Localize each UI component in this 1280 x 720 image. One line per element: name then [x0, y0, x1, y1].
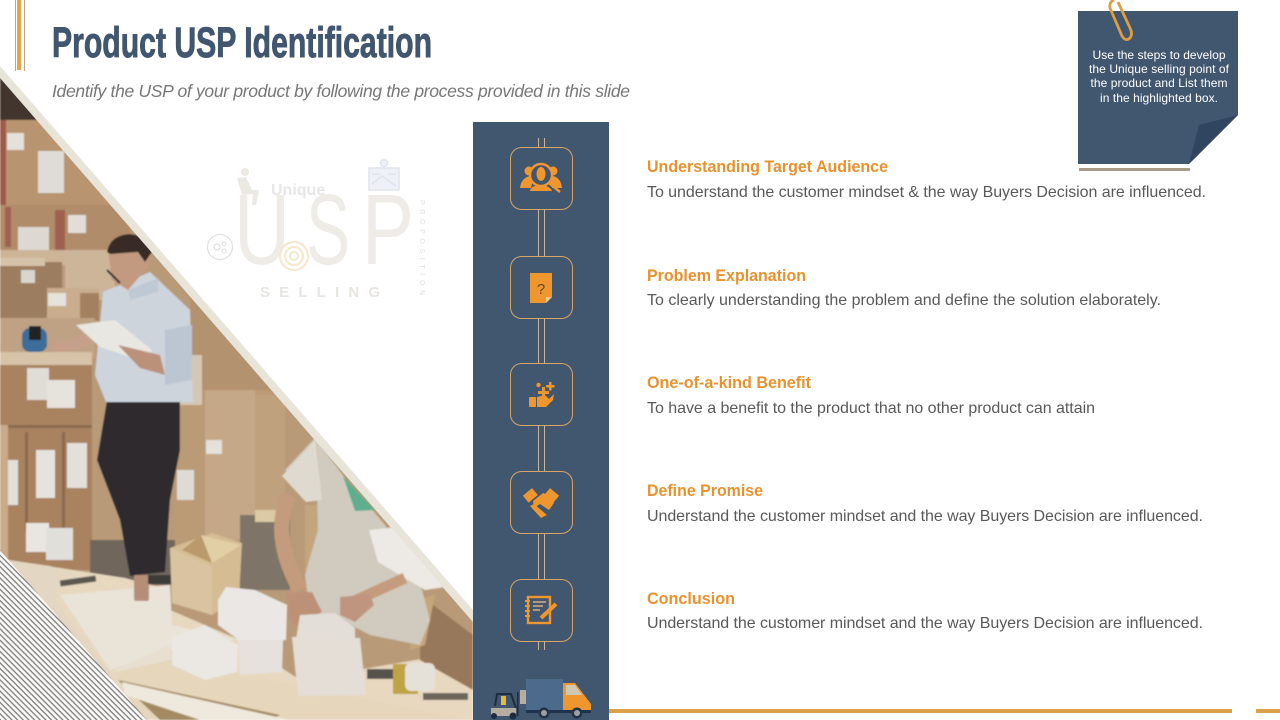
- note text: the Unique selling point of: [1089, 62, 1230, 76]
- icon: dashboard: [369, 160, 399, 190]
- step 5 text: [647, 590, 1203, 632]
- background boxes right: [191, 301, 260, 389]
- word: selling: SELLING: [260, 284, 380, 301]
- callout: sticky note: [1078, 0, 1238, 171]
- icon: target: [280, 242, 308, 270]
- panel: steps sidebar: [473, 122, 609, 720]
- step 1 text: To understand the customer mindset & the way Buyers Decision are influenced.: [647, 184, 1206, 201]
- watermark: USP logo: [208, 160, 425, 301]
- step 2 icon box: question document: [510, 256, 572, 318]
- woman: [420, 595, 473, 690]
- icon: gears: [208, 234, 232, 260]
- title: Product USP Identification: [52, 19, 432, 67]
- step 1 text: Understanding Target Audience: [647, 158, 888, 176]
- step 5 text: Understand the customer mindset and the way Buyers Decision are influenced.: [647, 615, 1203, 632]
- step 3 icon box: hand with sparkles: [510, 364, 572, 426]
- icon: forklift and delivery truck: [491, 679, 591, 720]
- word: proposition: PROPOSITION: [418, 200, 425, 295]
- bottom rule: [609, 709, 1280, 713]
- step 4 icon box: handshake: [510, 472, 572, 534]
- man: [97, 400, 180, 576]
- letter: S: S: [306, 174, 350, 286]
- table and sheets: [52, 566, 473, 720]
- step 2 text: [647, 267, 1161, 309]
- icon: reading person: [237, 168, 259, 205]
- step 4 text: Understand the customer mindset and the way Buyers Decision are influenced.: [647, 508, 1203, 525]
- step 5 text: Conclusion: [647, 590, 735, 608]
- note text: the product and List them: [1090, 76, 1228, 90]
- white boxes: [218, 587, 287, 641]
- step 3 text: To have a benefit to the product that no other product can attain: [647, 400, 1095, 417]
- word: Unique: Unique: [271, 182, 325, 199]
- step 2 text: To clearly understanding the problem and define the solution elaborately.: [647, 292, 1161, 309]
- background boxes left: [0, 78, 37, 121]
- step 1 icon box: audience search: [510, 148, 572, 210]
- note text: in the highlighted box.: [1100, 91, 1218, 105]
- subtitle: Identify the USP of your product by following the process provided in this slide: [52, 81, 630, 101]
- note text: Use the steps to develop: [1092, 48, 1226, 62]
- step 5 icon box: notepad and pen: [510, 580, 572, 642]
- step 3 text: [647, 374, 1095, 417]
- accent bars: [15, 0, 25, 71]
- letter: U: U: [234, 174, 290, 286]
- step 1 text: [647, 158, 1206, 201]
- tape gun: [367, 669, 397, 679]
- cardboard box: [170, 533, 242, 615]
- connector lines: [538, 138, 544, 650]
- hatched corner triangle: [0, 550, 147, 720]
- note text: [1089, 48, 1230, 105]
- photo: warehouse workers packing boxes: [0, 70, 473, 720]
- diagonal band: [0, 66, 473, 622]
- icon: paperclip: [1110, 0, 1132, 40]
- step 3 text: One-of-a-kind Benefit: [647, 374, 811, 392]
- step 4 text: Define Promise: [647, 482, 763, 500]
- step 4 text: [647, 482, 1203, 525]
- letter: P: P: [362, 174, 414, 286]
- tape dispenser: [22, 328, 47, 352]
- step 2 icon box: question document: ?: [537, 281, 545, 298]
- step 2 text: Problem Explanation: [647, 267, 806, 285]
